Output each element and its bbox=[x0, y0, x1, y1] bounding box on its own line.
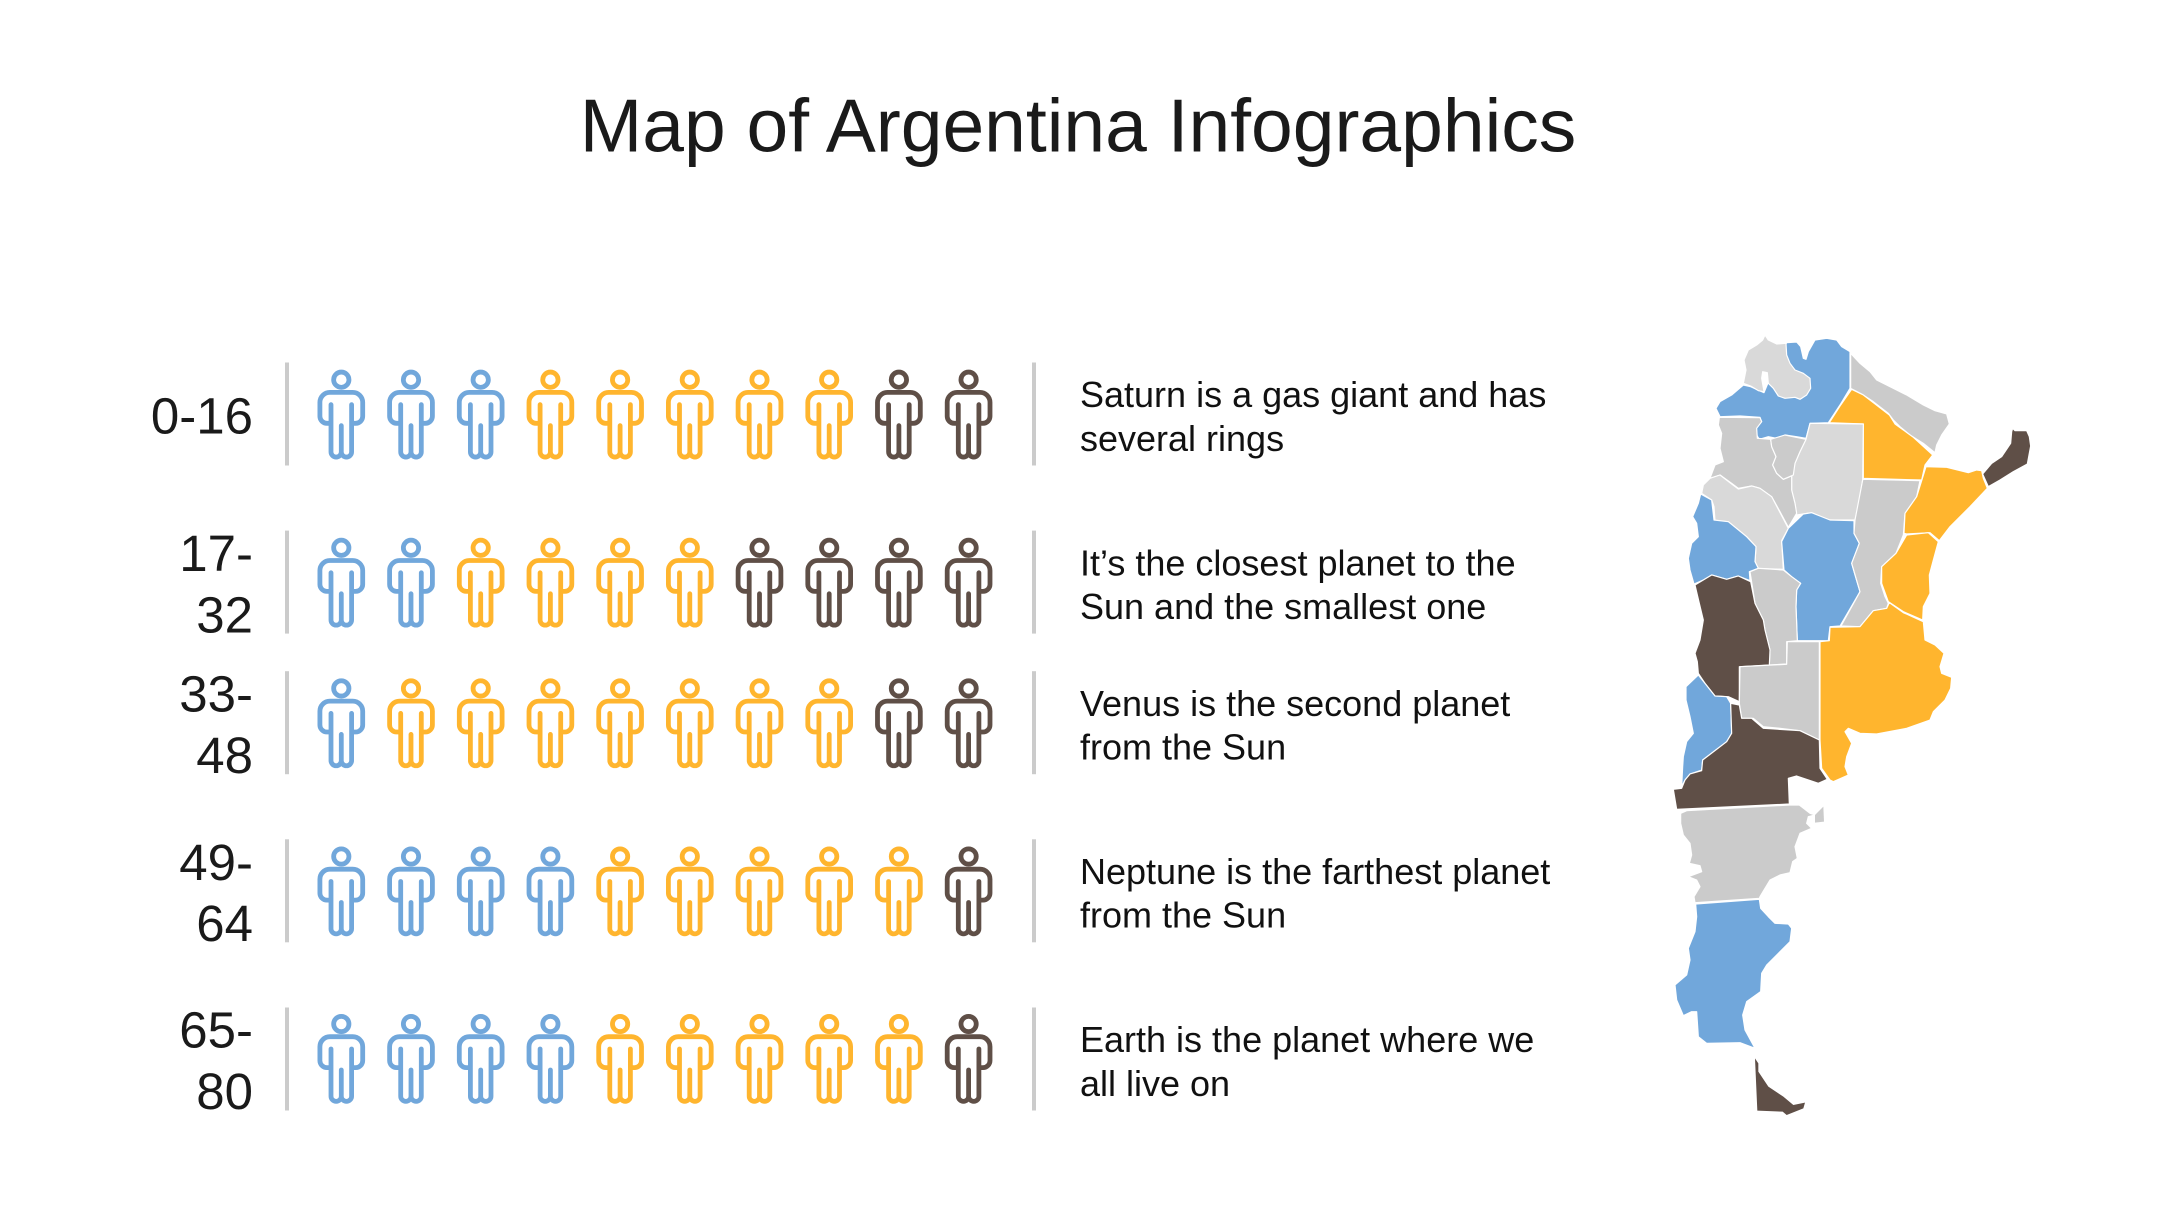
age label 33-48: 33- bbox=[179, 666, 253, 723]
icon row 5: 4 blue, 5 yellow, 1 brown bbox=[320, 1016, 990, 1101]
province: Jujuy bbox=[1743, 335, 1811, 399]
province: Formosa bbox=[1851, 353, 1949, 453]
right divider bbox=[1032, 362, 1036, 466]
row 4: 49-64 bbox=[179, 834, 1550, 952]
province: Santa Cruz bbox=[1675, 899, 1792, 1048]
icon row 2: 2 blue, 4 yellow, 4 brown bbox=[320, 540, 990, 625]
province: Entre Rios bbox=[1882, 533, 1938, 620]
row 5: 65-80 bbox=[179, 1001, 1534, 1120]
left divider bbox=[285, 531, 289, 634]
province: Salta bbox=[1716, 338, 1850, 439]
province: La Pampa bbox=[1739, 642, 1819, 740]
icon row 3: 1 blue, 7 yellow, 2 brown bbox=[320, 681, 990, 766]
map of Argentina bbox=[1673, 335, 2031, 1115]
province: Tucuman bbox=[1771, 435, 1806, 479]
row 3: 33-48 bbox=[179, 666, 1510, 784]
title: Map of Argentina Infographics bbox=[580, 84, 1576, 168]
description row 2: It’s the closest planet to the bbox=[1080, 542, 1516, 583]
description row 3: Venus is the second planet bbox=[1080, 683, 1510, 724]
province: Chaco bbox=[1829, 389, 1933, 480]
province: Cordoba bbox=[1782, 513, 1860, 641]
right divider bbox=[1032, 531, 1036, 634]
province: San Luis bbox=[1750, 568, 1801, 665]
province: Santiago del Estero bbox=[1792, 423, 1863, 520]
Chubut peninsula bbox=[1815, 807, 1824, 823]
province: Catamarca bbox=[1710, 417, 1797, 527]
icon row 1: 3 blue, 5 yellow, 2 brown bbox=[320, 372, 990, 457]
province: Buenos Aires bbox=[1820, 603, 1952, 782]
row 2: 17-32 bbox=[179, 525, 1516, 643]
age label 49-64: 49- bbox=[179, 834, 253, 891]
right divider bbox=[1032, 671, 1036, 774]
province: San Juan bbox=[1688, 494, 1758, 584]
province: Neuquen bbox=[1682, 675, 1732, 787]
age label 0-16: 0-16 bbox=[151, 387, 253, 444]
age label 65-80: 80 bbox=[196, 1063, 253, 1120]
description row 3: from the Sun bbox=[1080, 727, 1286, 768]
province: Chubut bbox=[1681, 805, 1815, 903]
left divider bbox=[285, 1008, 289, 1110]
age label 49-64: 64 bbox=[196, 895, 253, 952]
age label 65-80: 65- bbox=[179, 1001, 253, 1058]
description row 5: Earth is the planet where we bbox=[1080, 1019, 1534, 1060]
description row 4: from the Sun bbox=[1080, 895, 1286, 936]
left divider bbox=[285, 362, 289, 466]
description row 2: Sun and the smallest one bbox=[1080, 586, 1486, 627]
province: Mendoza bbox=[1695, 575, 1770, 702]
province: Misiones bbox=[1983, 428, 2031, 487]
right divider bbox=[1032, 839, 1036, 942]
province: Corrientes bbox=[1904, 467, 1987, 541]
age label 17-32: 17- bbox=[179, 525, 253, 582]
province: Rio Negro bbox=[1673, 703, 1827, 809]
description row 5: all live on bbox=[1080, 1063, 1230, 1104]
description row 1: several rings bbox=[1080, 418, 1284, 459]
description row 1: Saturn is a gas giant and has bbox=[1080, 374, 1546, 415]
description row 4: Neptune is the farthest planet bbox=[1080, 851, 1550, 892]
left divider bbox=[285, 671, 289, 774]
age label 17-32: 32 bbox=[196, 586, 253, 643]
left divider bbox=[285, 839, 289, 942]
province: Santa Fe bbox=[1841, 479, 1920, 627]
province: Tierra del Fuego bbox=[1755, 1058, 1805, 1115]
age label 33-48: 48 bbox=[196, 727, 253, 784]
row 1: 0-16 bbox=[151, 362, 1546, 466]
icon row 4: 4 blue, 5 yellow, 1 brown bbox=[320, 849, 990, 934]
province: La Rioja bbox=[1702, 475, 1788, 569]
right divider bbox=[1032, 1008, 1036, 1110]
